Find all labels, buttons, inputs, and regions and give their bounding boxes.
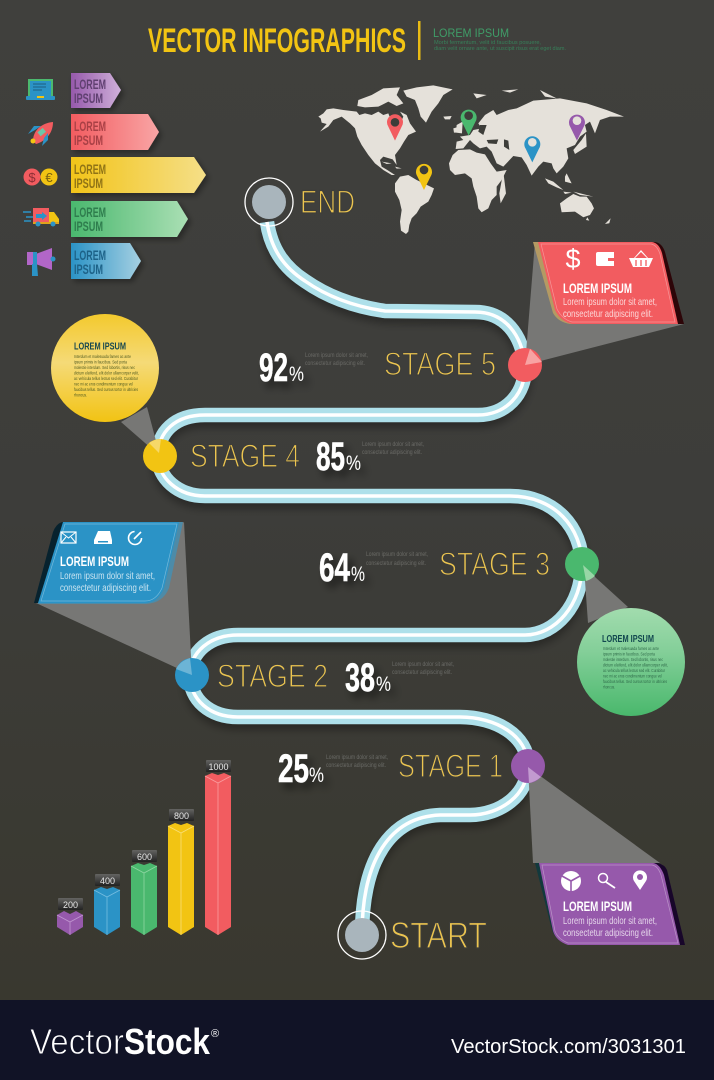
stage 5: % xyxy=(289,363,304,386)
callout: red: LOREM IPSUM xyxy=(563,280,632,296)
tab: purple: LOREM xyxy=(74,76,106,92)
stage 4: Lorem ipsum dolor sit amet, xyxy=(362,442,424,448)
stage 1: % xyxy=(309,764,324,787)
end marker xyxy=(245,178,293,226)
stage 2: % xyxy=(376,673,391,696)
red icons xyxy=(565,244,653,274)
title: VECTOR INFOGRAPHICS xyxy=(148,22,406,60)
callout: blue: consectetur adipiscing elit. xyxy=(60,582,151,594)
tab: yellow: LOREM xyxy=(74,161,106,177)
stage 2: consectetur adipiscing elit. xyxy=(392,670,452,676)
stage 3: Lorem ipsum dolor sit amet, xyxy=(366,552,428,558)
blue icons xyxy=(61,531,142,544)
bar: 1000 xyxy=(205,760,231,935)
icon: megaphone xyxy=(27,248,56,276)
icon: truck xyxy=(23,208,59,226)
title divider xyxy=(418,21,420,60)
circle callout: green: rhoncus. xyxy=(603,684,615,690)
tab: red xyxy=(71,114,159,150)
stage 3: consectetur adipiscing elit. xyxy=(366,561,426,567)
bar: 800: 800 xyxy=(174,811,189,821)
stage 4: % xyxy=(346,452,361,475)
callout: blue: LOREM IPSUM xyxy=(60,553,129,569)
tab: green: IPSUM xyxy=(74,218,103,234)
circle callout: green: dictum eleifend, elit dolor ullamcorper velit, xyxy=(603,662,668,668)
callout: red xyxy=(533,242,684,324)
start label: START xyxy=(390,915,487,956)
circle callout: yellow: nec mi ac eros condimentum congue vel xyxy=(74,382,133,386)
tab: green: LOREM xyxy=(74,204,106,220)
stage 4: consectetur adipiscing elit. xyxy=(362,450,422,456)
circle callout: green: ac vehicula tellus lectus sed elit. Curabitur xyxy=(603,668,665,673)
footer band xyxy=(0,1000,714,1080)
icon: laptop xyxy=(26,79,55,100)
circle callout: green: faucibus tellus. Sed cursus tortor in ultricies xyxy=(603,679,668,684)
subtitle block: Morbi fermentum, velit id faucibus posuere, xyxy=(434,40,541,46)
start marker xyxy=(338,911,386,959)
stage 3: STAGE 3 xyxy=(439,546,550,582)
circle callout: yellow: ipsum primis in faucibus. Sed porta xyxy=(74,360,127,364)
pin: yellow xyxy=(416,164,432,190)
stage 3: 64 xyxy=(319,546,351,590)
stage 5: 92 xyxy=(259,346,288,390)
callout: purple: Lorem ipsum dolor sit amet, xyxy=(563,915,657,927)
circle callout: green: LOREM IPSUM xyxy=(602,634,654,645)
bar: 200 xyxy=(57,898,83,935)
tab: blue: LOREM xyxy=(74,247,106,263)
winding road xyxy=(158,222,582,935)
tab: yellow xyxy=(71,157,206,193)
tab: purple: IPSUM xyxy=(74,90,103,106)
callout: red: consectetur adipiscing elit. xyxy=(563,308,653,320)
circle callout: yellow: faucibus tellus. Sed cursus tortor in ultricies xyxy=(74,387,139,392)
stage 4: STAGE 4 xyxy=(190,438,300,474)
circle callout: green: molestie interdum. Sed lobortis, risus nec xyxy=(603,657,664,662)
stage 1 xyxy=(278,747,660,863)
pin: purple xyxy=(569,115,585,141)
tab: blue xyxy=(71,243,141,279)
footer logo: ® xyxy=(211,1028,219,1040)
subtitle block: LOREM IPSUM xyxy=(433,26,509,40)
stage 5 xyxy=(259,242,684,390)
red icons: $ xyxy=(565,244,581,274)
circle callout: yellow: dictum eleifend, elit dolor ullamcorper velit, xyxy=(74,370,139,376)
callout: red: Lorem ipsum dolor sit amet, xyxy=(563,296,657,308)
callout: blue xyxy=(34,522,183,604)
stage 2: 38 xyxy=(345,656,375,700)
pin: blue xyxy=(524,136,540,162)
stage 1: STAGE 1 xyxy=(398,748,503,784)
tab: green xyxy=(71,201,188,237)
circle callout: yellow: rhoncus. xyxy=(74,392,87,398)
bar: 400: 400 xyxy=(100,876,115,886)
stage 3: % xyxy=(351,563,365,586)
stage 4 xyxy=(121,407,424,479)
tab: purple xyxy=(71,73,121,108)
circle callout: yellow: molestie interdum. Sed lobortis, risus nec xyxy=(74,365,136,370)
stage 4: 85 xyxy=(316,435,345,479)
stage 1: 25 xyxy=(278,747,309,791)
footer logo: Stock xyxy=(124,1021,211,1062)
icon: coins: $ xyxy=(28,170,36,185)
tab: red: IPSUM xyxy=(74,132,103,148)
bar: 600 xyxy=(131,850,157,935)
tab: yellow: IPSUM xyxy=(74,175,103,191)
stage 5: Lorem ipsum dolor sit amet, xyxy=(305,353,368,359)
pin: red xyxy=(387,114,403,141)
icon: coins xyxy=(24,168,58,186)
tab: red: LOREM xyxy=(74,118,106,134)
footer logo xyxy=(30,1021,219,1062)
icon: rocket xyxy=(28,122,53,146)
footer logo: Vector xyxy=(30,1021,124,1062)
icon: coins: € xyxy=(45,170,53,185)
callout: blue: Lorem ipsum dolor sit amet, xyxy=(60,570,155,582)
pin: green xyxy=(461,110,477,136)
map seas xyxy=(478,125,509,150)
bar: 200: 200 xyxy=(63,900,78,910)
end label: END xyxy=(300,184,355,220)
stage 5: consectetur adipiscing elit. xyxy=(305,361,365,367)
bar: 1000: 1000 xyxy=(208,762,229,772)
circle callout: green: nec mi ac eros condimentum congue vel xyxy=(603,674,662,678)
road shadow xyxy=(158,228,582,941)
circle callout: green xyxy=(577,608,685,716)
circle callout: green: ipsum primis in faucibus. Sed porta xyxy=(603,652,655,656)
bar: 400 xyxy=(94,874,120,935)
subtitle block xyxy=(433,26,566,52)
stage 2: STAGE 2 xyxy=(217,658,328,694)
tab: blue: IPSUM xyxy=(74,261,103,277)
circle callout: green: Interdum et malesuada fames ac ante xyxy=(603,646,659,651)
circle callout: yellow: Interdum et malesuada fames ac ante xyxy=(74,354,131,359)
circle callout: yellow xyxy=(51,314,159,422)
subtitle block: diam velit ornare ante, ut suscipit risus erat eget diam. xyxy=(434,46,566,52)
callout: purple xyxy=(535,863,685,945)
stage 3 xyxy=(319,546,628,623)
callout: purple: LOREM IPSUM xyxy=(563,898,632,914)
stage 2: Lorem ipsum dolor sit amet, xyxy=(392,662,454,668)
world map xyxy=(318,85,624,234)
purple icons xyxy=(561,870,647,891)
circle callout: yellow: LOREM IPSUM xyxy=(74,342,126,352)
circle callout: yellow: ac vehicula tellus lectus sed elit. Curabitur xyxy=(74,376,138,381)
stage 5: STAGE 5 xyxy=(384,346,496,382)
stage 2 xyxy=(36,522,454,700)
bar: 600: 600 xyxy=(137,852,152,862)
bar: 800 xyxy=(168,809,194,935)
bar chart xyxy=(57,760,231,935)
stage 1: consectetur adipiscing elit. xyxy=(326,763,386,769)
stage 1: Lorem ipsum dolor sit amet, xyxy=(326,755,388,761)
callout: purple: consectetur adipiscing elit. xyxy=(563,927,653,939)
footer url: VectorStock.com/3031301 xyxy=(451,1036,686,1058)
